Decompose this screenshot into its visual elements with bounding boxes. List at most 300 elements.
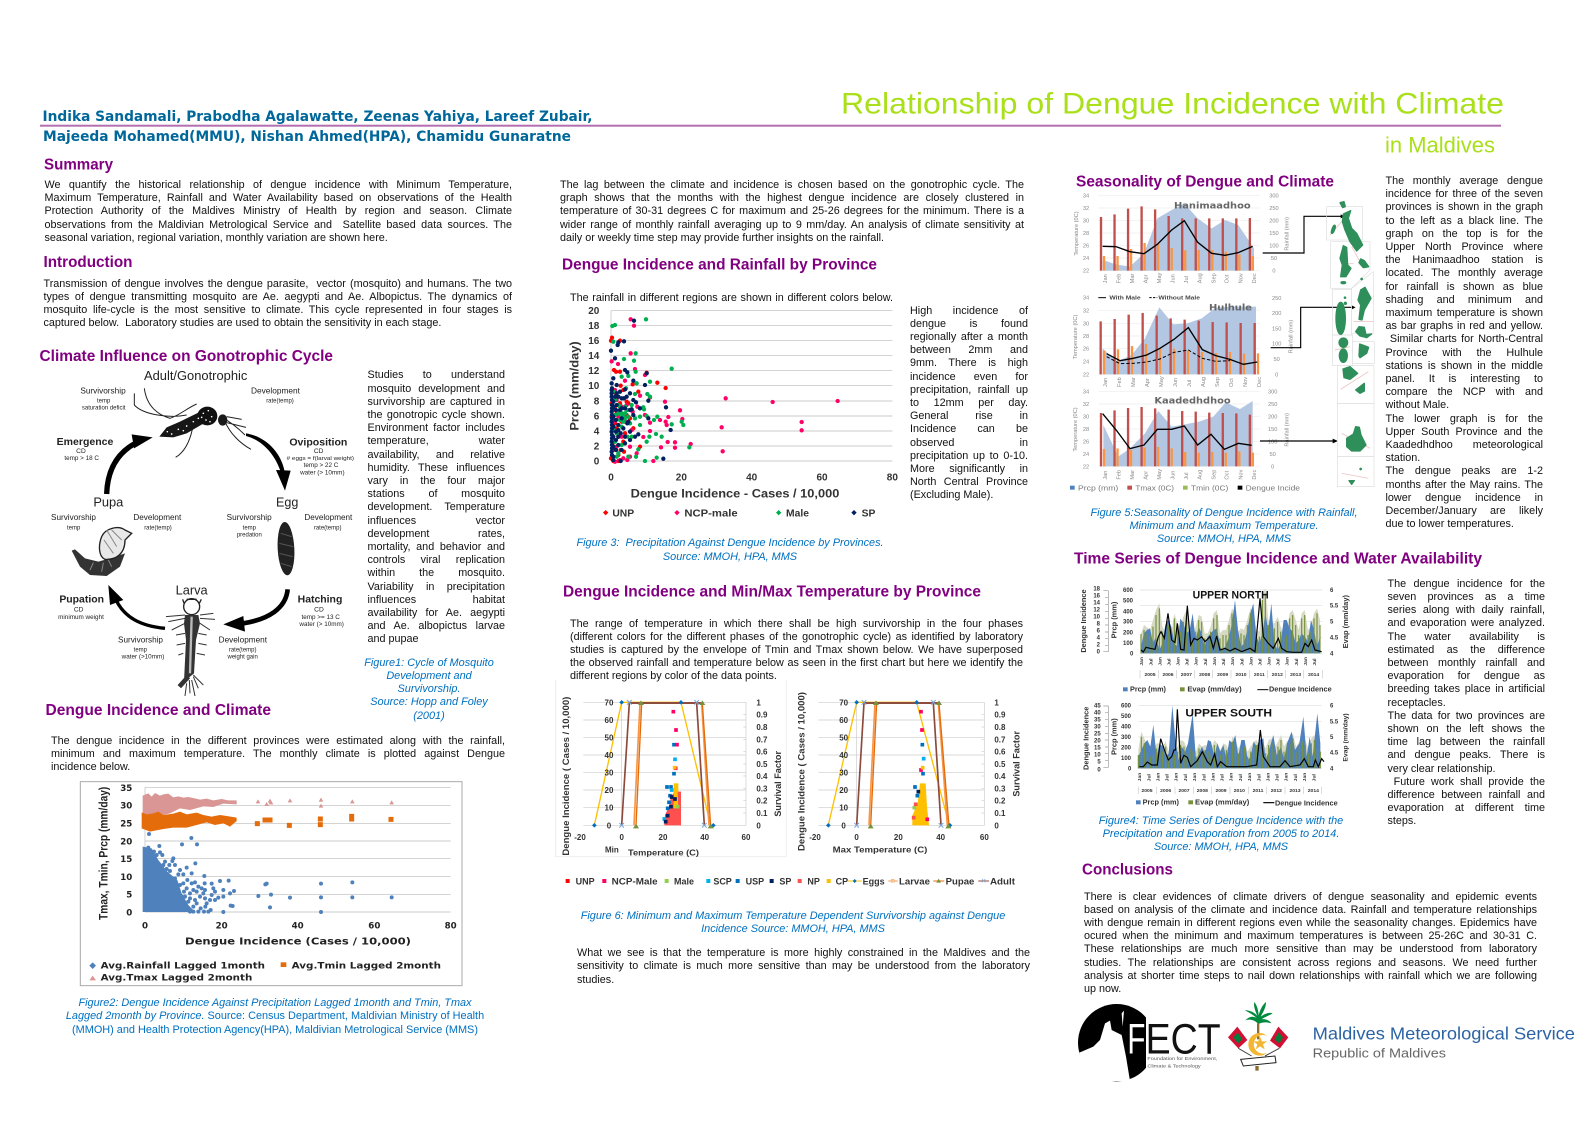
text block: introduction xyxy=(44,278,512,329)
text block: summary: Maximum Temperature, Rainfall and Water Availability based on observations of the Health xyxy=(44,192,512,204)
text block: seasonality notes: panel. It is interesting to xyxy=(1386,373,1543,385)
text block: temperature conclusion: studies. xyxy=(577,974,614,986)
panel: Hulhule chart: Jul xyxy=(1187,380,1193,387)
panel: min temperature chart: Min xyxy=(605,846,619,855)
panel: Upper South chart: 0 xyxy=(1128,766,1132,772)
diagram labels: predation xyxy=(237,533,262,539)
panel: max temperature chart: 30 xyxy=(839,769,849,778)
caption: figure 4 xyxy=(1099,815,1343,853)
panel: max temperature chart: 0 xyxy=(841,821,846,830)
panel: Upper South chart: 2006 xyxy=(1160,788,1171,794)
panel: Upper North chart: 6 xyxy=(1097,628,1101,634)
y axis title: Tmax, Tmin, Prcp (mm/day) xyxy=(96,787,110,920)
panel: Upper South chart: 6 xyxy=(1330,703,1334,709)
text block: time series notes: difference between rainfall and xyxy=(1388,789,1545,801)
panel: Upper South chart: Jan xyxy=(1192,773,1198,781)
panel: Upper South chart: 30 xyxy=(1094,724,1101,730)
caption: figure 3 xyxy=(576,537,884,562)
panel: Kaadedhdhoo chart: Jan xyxy=(1103,471,1109,480)
panel: Upper South chart: Jul xyxy=(1146,774,1152,781)
diagram labels: temp xyxy=(243,525,257,531)
caption: figure 2 xyxy=(66,997,484,1036)
panel: min temperature chart: 0 xyxy=(756,821,761,830)
panel: Hulhule chart: 100 xyxy=(1272,342,1281,348)
legend: Dengue Incide xyxy=(1246,483,1300,492)
panel: min temperature chart: Survival Factor xyxy=(773,750,783,817)
panel: Hulhule chart: Mar xyxy=(1131,377,1137,387)
panel: Kaadedhdhoo chart: 26 xyxy=(1083,439,1089,445)
panel: Hanimaadhoo chart: Temperature (0C) xyxy=(1074,211,1080,256)
panel: min temperature chart xyxy=(561,697,783,857)
panel: Hanimaadhoo chart: 22 xyxy=(1083,269,1089,275)
panel: max temperature chart: 0.3 xyxy=(994,784,1006,793)
panel: Upper North chart: 0 xyxy=(1130,651,1134,657)
panel: Upper North chart: Jan xyxy=(1248,657,1254,666)
axis labels: 6 xyxy=(594,411,600,422)
text block: rainfall notes: North Central Province xyxy=(910,476,1028,488)
panel: max temperature chart: 40 xyxy=(839,751,849,760)
text block: seasonality notes: Kaadedhdhoo meteorological xyxy=(1386,439,1543,451)
authors: Majeeda Mohamed(MMU), Nishan Ahmed(HPA), Chamidu Gunaratne xyxy=(43,129,571,145)
axis labels: 20 xyxy=(216,921,228,931)
chart: figure 5 seasonality charts and map xyxy=(1070,194,1356,492)
title: Relationship of Dengue Incidence with Climate xyxy=(841,88,1504,120)
panel: Hulhule chart: 28 xyxy=(1083,334,1089,340)
text block: rainfall notes: incidence even for xyxy=(910,371,1028,383)
panel: min temperature chart: -20 xyxy=(574,833,586,842)
diagram labels: rate(temp) xyxy=(266,399,294,405)
panel: Upper South chart: Jul xyxy=(1311,774,1317,781)
diagram: mosquito gonotrophic cycle xyxy=(51,369,354,696)
heading: Conclusions: Conclusions xyxy=(1082,862,1173,878)
panel: max temperature chart xyxy=(796,692,1021,855)
panel: max temperature chart: 0 xyxy=(994,821,999,830)
panel: Upper North chart: 5 xyxy=(1330,620,1334,626)
diagram labels: Survivorship xyxy=(118,636,164,645)
axis labels: 0 xyxy=(142,921,148,931)
text block: lag between climate and incidence: daily or weekly time step may provide further insights on the rainfall. xyxy=(560,232,884,244)
panel: Hanimaadhoo chart: Jun xyxy=(1171,274,1177,283)
panel: max temperature chart: 0 xyxy=(854,833,859,842)
text block: time series notes: time lag between the rainfall xyxy=(1388,736,1545,748)
panel: max temperature chart: Survival Factor xyxy=(1011,730,1021,797)
legend xyxy=(566,876,1015,886)
panel: Upper North chart: Evap (mm/day) xyxy=(1343,595,1350,648)
text block: seasonality notes: to the left as a black line. The xyxy=(1386,215,1543,227)
panel: Kaadedhdhoo chart: 32 xyxy=(1083,402,1089,408)
text block: introduction: types of dengue transmitting mosquito are Ae. aegypti and Ae. Albopictus. The dynamics of xyxy=(44,291,512,303)
text block: gonotrophic cycle notes: Environment factor includes xyxy=(368,422,505,434)
panel: Upper South chart: 45 xyxy=(1094,703,1101,709)
icon: larva xyxy=(166,599,215,696)
series: rainfall xyxy=(143,834,392,912)
panel: min temperature chart: 60 xyxy=(605,716,614,725)
icon: map of Maldives atolls xyxy=(1327,202,1374,487)
legend xyxy=(89,961,441,984)
text block: seasonality notes: Upper North Province where xyxy=(1386,241,1543,253)
text block: rainfall notes: precipitation, rainfall up xyxy=(910,384,1028,396)
panel: Upper North chart: 16 xyxy=(1093,594,1101,600)
panel: Upper South chart: Jan xyxy=(1155,773,1161,781)
text block: seasonality notes: stations is shown in the middle xyxy=(1386,360,1543,372)
text block: lag between climate and incidence xyxy=(560,179,1024,244)
panel: Upper North chart: 5.5 xyxy=(1330,604,1339,610)
panel: Upper North chart: Jan xyxy=(1303,657,1309,666)
panel: Hulhule chart: Without Male xyxy=(1158,295,1200,301)
panel: Upper South chart: 300 xyxy=(1121,735,1132,741)
panel: Upper South chart: 100 xyxy=(1121,756,1132,762)
panel: Upper South chart: 5.5 xyxy=(1330,719,1339,725)
arrow: hatching xyxy=(223,589,288,632)
text block: time series notes: evaporation for dengue as xyxy=(1388,670,1545,682)
panel: Hanimaadhoo chart xyxy=(1074,194,1291,283)
heading: Introduction: Introduction xyxy=(44,254,132,271)
panel: Upper North chart: 400 xyxy=(1123,609,1134,615)
legend: UNP xyxy=(612,508,634,519)
text block: summary xyxy=(44,179,512,244)
panel: Upper South chart: 0 xyxy=(1097,767,1101,773)
panel: min temperature chart: 40 xyxy=(605,751,614,760)
panel: max temperature chart: 0.6 xyxy=(994,748,1006,757)
panel: Hulhule chart: 50 xyxy=(1274,357,1280,363)
panel: Upper North chart: 4.5 xyxy=(1330,636,1339,642)
panel: max temperature chart: 60 xyxy=(839,716,849,725)
panel: Kaadedhdhoo chart: Kaadedhdhoo xyxy=(1154,396,1231,406)
logo: FECT xyxy=(1078,1000,1221,1083)
panel: Upper North chart: Jan xyxy=(1194,657,1200,666)
panel: Upper North chart: Prcp (mm) xyxy=(1130,687,1166,694)
panel: Upper South chart: 40 xyxy=(1094,710,1101,716)
axis labels: 20 xyxy=(676,473,687,484)
panel: Hanimaadhoo chart: Apr xyxy=(1144,274,1150,283)
panel: max temperature chart: 10 xyxy=(839,804,849,813)
axis labels: 20 xyxy=(588,306,600,317)
caption: figure 6: Incidence Source: MMOH, HPA, MMS xyxy=(701,923,885,935)
text block: rainfall notes: 9mm. There is high xyxy=(910,357,1028,369)
panel: Upper North chart: 2012 xyxy=(1272,672,1283,678)
panel: Kaadedhdhoo chart: Dec xyxy=(1252,469,1258,480)
panel: Hulhule chart: Nov xyxy=(1243,377,1249,387)
diagram labels: Development xyxy=(219,636,268,645)
panel: Kaadedhdhoo chart: 0 xyxy=(1271,464,1274,470)
panel: min temperature chart: 0 xyxy=(607,821,612,830)
panel: Upper South chart: 35 xyxy=(1094,717,1101,723)
panel: Upper North chart: Jan xyxy=(1212,657,1218,666)
panel: Upper North chart: 8 xyxy=(1097,621,1101,627)
panel: Hulhule chart: Dec xyxy=(1257,377,1263,387)
text block: time series notes xyxy=(1388,578,1545,827)
panel: Upper North chart: 600 xyxy=(1123,588,1134,594)
panel: Upper South chart: Dengue Incidence xyxy=(1275,801,1338,808)
text block: summary: seasonal variation, regional variation, monthly variation are shown here. xyxy=(44,232,388,244)
legend: SCP xyxy=(713,876,732,886)
panel: Upper North chart: UPPER NORTH xyxy=(1193,589,1269,601)
axis labels: 18 xyxy=(588,321,600,332)
panel: Upper South chart: Jan xyxy=(1284,773,1290,781)
text block: rainfall notes: observed in xyxy=(910,437,1028,449)
panel: Upper South chart: 400 xyxy=(1121,724,1132,730)
panel: Hanimaadhoo chart: 150 xyxy=(1269,231,1279,237)
text block: conclusions xyxy=(1084,890,1537,995)
panel: Upper North chart: Prcp (mm) xyxy=(1112,602,1119,638)
panel: Kaadedhdhoo chart: 34 xyxy=(1083,390,1089,396)
text block: time series notes: shown on the left shows the xyxy=(1388,723,1545,735)
axis labels: 10 xyxy=(588,381,600,392)
diagram labels: Pupa xyxy=(93,496,124,510)
text block: seasonality notes: due to lower temperatures. xyxy=(1386,518,1514,530)
legend: Tmin (0C) xyxy=(1191,483,1228,492)
panel: Upper North chart: 2014 xyxy=(1308,672,1319,678)
text block: seasonality notes: for rainfall is shown as blue xyxy=(1386,281,1543,293)
panel: Hanimaadhoo chart: Jan xyxy=(1103,274,1109,283)
diagram labels: temp > 18 C xyxy=(64,455,99,462)
panel: Hulhule chart: 30 xyxy=(1083,321,1089,327)
panel: Hanimaadhoo chart: Feb xyxy=(1116,274,1122,283)
panel: Hanimaadhoo chart: 0 xyxy=(1272,269,1276,275)
logo: FECT: Climate & Technology xyxy=(1147,1063,1201,1069)
logos xyxy=(1078,1000,1575,1083)
diagram labels: weight gain xyxy=(227,654,258,660)
text block: dengue incidence and climate: incidence below. xyxy=(51,760,130,772)
text block: time series notes: The data for two provinces are xyxy=(1388,710,1545,722)
axis labels: 4 xyxy=(594,426,600,437)
panel: Hulhule chart: 250 xyxy=(1272,296,1281,302)
text block: rainfall notes: regionally after a month xyxy=(910,331,1028,343)
axis labels: Dengue Incidence - Cases / 10,000 xyxy=(631,486,840,500)
panel: Hulhule chart: Feb xyxy=(1117,377,1123,387)
text block: seasonality notes: maximum temperature is shown xyxy=(1386,307,1543,319)
text block: introduction: captured below. Laboratory studies are used to obtain the sensitivity in each stage. xyxy=(44,317,441,329)
caption: figure 6: Figure 6: Minimum and Maximum Temperature Dependent Survivorship against Dengue xyxy=(581,910,1005,922)
panel: max temperature chart: 40 xyxy=(936,833,946,842)
text block: gonotrophic cycle notes: humidity. These influences xyxy=(368,462,505,474)
arrow: Hulhule to map xyxy=(1271,305,1356,348)
panel: min temperature chart: 0 xyxy=(619,833,624,842)
panel: Kaadedhdhoo chart: Jun xyxy=(1171,471,1177,480)
caption: figure 2: Lagged 2month by Province. Source: Census Department, Maldivian Ministry of Health xyxy=(66,1010,484,1022)
axis labels: 5 xyxy=(126,891,132,901)
text block: gonotrophic cycle notes: development. Temperature xyxy=(368,501,505,513)
panel: Upper South chart: 2011 xyxy=(1253,788,1264,794)
text block: temperature range: (different colors for the different phases of the gonotrophic cycle) as identified by laboratory xyxy=(570,631,1023,643)
panel: Upper South chart: 5 xyxy=(1097,759,1101,765)
caption: figure 1 xyxy=(364,657,494,722)
panel: Upper North chart: 2005 xyxy=(1144,672,1156,678)
panel: Upper South chart: Jan xyxy=(1137,773,1143,781)
axis labels xyxy=(567,306,898,500)
text block: lag between climate and incidence: graph shows that the months with the highest dengue incidence are closely clustered in xyxy=(560,192,1024,204)
heading: Dengue Incidence and Climate: Dengue Incidence and Climate xyxy=(46,702,271,719)
panel: Upper North chart: 4 xyxy=(1097,635,1101,641)
text block: rainfall chart intro: The rainfall in different regions are shown in different colors below. xyxy=(570,292,893,304)
axis labels: 60 xyxy=(816,473,828,484)
text block: temperature range: The range of temperature in which there shall be high survivorship in the four phases xyxy=(570,618,1023,630)
panel: Kaadedhdhoo chart: Sep xyxy=(1211,470,1217,480)
panel: Upper South chart: 2007 xyxy=(1178,788,1190,794)
panel: Upper South chart: 2013 xyxy=(1289,788,1301,794)
panel: min temperature chart: 70 xyxy=(605,698,614,707)
caption: figure 1: Figure1: Cycle of Mosquito xyxy=(364,657,494,669)
text block: conclusions: analysis at shorter time steps to nail down relationships with rainfall which we are following xyxy=(1084,970,1537,982)
diagram labels: CD xyxy=(314,607,324,614)
panel: Upper North chart: Jul xyxy=(1203,658,1209,666)
panel: Upper North chart: 100 xyxy=(1123,641,1134,647)
text block: temperature range: different regions by color of the data points. xyxy=(570,670,777,682)
panel: Upper South chart: Jan xyxy=(1174,773,1180,781)
text block: seasonality notes: Upper South Province and the xyxy=(1386,426,1543,438)
panel: min temperature chart: 0.2 xyxy=(756,797,768,806)
panel: Upper North chart xyxy=(1081,587,1350,694)
text block: gonotrophic cycle notes: and pupae xyxy=(368,633,419,645)
diagram labels: CD xyxy=(74,607,84,614)
legend: Adult xyxy=(990,876,1015,886)
text block: seasonality notes: lower dengue incidence in xyxy=(1386,492,1543,504)
text block: dengue incidence and climate: The dengue incidence in the different provinces were estimated along with the rainfall, xyxy=(51,735,505,747)
panel: max temperature chart: 0.8 xyxy=(994,723,1006,732)
text block: temperature conclusion xyxy=(577,947,1030,986)
diagram labels xyxy=(51,369,354,660)
text block: introduction: mosquito life-cycle is the most sensitive to climate. This cycle represented in four stages is xyxy=(44,304,512,316)
axis labels: 0 xyxy=(608,473,614,484)
caption: figure 1: Development and xyxy=(386,670,472,682)
panel: Upper South chart: Jul xyxy=(1256,774,1262,781)
panel: Hanimaadhoo chart: 100 xyxy=(1269,244,1279,250)
panel: Upper South chart: Evap (mm/day) xyxy=(1344,713,1350,762)
panel: Upper South chart: Evap (mm/day) xyxy=(1195,800,1249,807)
panel: Hulhule chart: Aug xyxy=(1201,377,1207,387)
diagram labels: CD xyxy=(314,448,324,455)
panel: Upper North chart: 6 xyxy=(1330,588,1334,594)
panel: Upper North chart: 2008 xyxy=(1199,672,1210,678)
legend: Larvae xyxy=(899,876,930,886)
panel: Upper North chart: 2013 xyxy=(1290,672,1301,678)
text block: seasonality notes: graph on the top is for the xyxy=(1386,228,1543,240)
panel: min temperature chart: 0.8 xyxy=(756,723,768,732)
panel: Upper North chart: 4 xyxy=(1330,651,1334,657)
diagram labels: water (> 10mm) xyxy=(298,621,344,628)
diagram labels: temp xyxy=(134,647,148,653)
panel: Hulhule chart: Temperature (0C) xyxy=(1073,315,1079,359)
text block: time series notes: steps. xyxy=(1388,815,1416,827)
axis labels: 12 xyxy=(588,366,600,377)
diagram labels: # eggs = f(larval weight) xyxy=(287,456,354,462)
legend: UNP xyxy=(576,876,595,886)
panel: Hanimaadhoo chart: Hanimaadhoo xyxy=(1174,201,1251,211)
text block: dengue incidence and climate xyxy=(51,735,505,772)
diagram labels: temp > 22 C xyxy=(304,462,339,469)
panel: Upper South chart: Jul xyxy=(1220,774,1226,781)
diagram labels: Hatching xyxy=(298,595,342,606)
diagram labels: water (>10mm) xyxy=(121,653,164,660)
panel: Kaadedhdhoo chart: Oct xyxy=(1225,470,1231,480)
panel: Hanimaadhoo chart: Mar xyxy=(1130,273,1136,283)
panel: Hulhule chart: Apr xyxy=(1145,378,1151,387)
panel: Hanimaadhoo chart: 30 xyxy=(1083,219,1089,225)
text block: seasonality notes: compare the NCP with and xyxy=(1386,386,1543,398)
panel: Kaadedhdhoo chart: Mar xyxy=(1130,470,1136,480)
text block: conclusions: ocured when the minimum and maximum temperatures is between 25-26C and 30-31 C. xyxy=(1084,930,1537,942)
panel: Upper South chart: Jan xyxy=(1229,773,1235,781)
panel: Upper South chart: Jul xyxy=(1238,774,1244,781)
legend: Prcp (mm) xyxy=(1078,483,1118,492)
icon: pupa xyxy=(72,528,132,576)
panel: Upper South chart: Jan xyxy=(1247,773,1253,781)
legend: Eggs xyxy=(863,876,885,886)
legend: Pupae xyxy=(946,876,974,886)
panel: Hanimaadhoo chart: 28 xyxy=(1083,231,1089,237)
panel: max temperature chart: 0.9 xyxy=(994,711,1006,720)
panel: Hulhule chart xyxy=(1073,295,1295,387)
text block: time series notes: breeding takes place in artificial xyxy=(1388,683,1545,695)
panel: Upper North chart: Jul xyxy=(1294,658,1300,666)
legend: Avg.Rainfall Lagged 1month xyxy=(101,961,265,971)
panel: Upper North chart: 2006 xyxy=(1162,672,1174,678)
diagram labels: rate(temp) xyxy=(314,525,341,531)
panel: Upper North chart: Jul xyxy=(1312,658,1318,666)
chart: figure 3 precipitation by province scatter xyxy=(567,306,898,519)
panel: min temperature chart: 1 xyxy=(756,698,761,707)
text block: gonotrophic cycle notes: influences habitat xyxy=(368,594,505,606)
panel: Kaadedhdhoo chart: Nov xyxy=(1238,469,1244,480)
panel: Hulhule chart: With Male xyxy=(1109,295,1141,301)
panel: Upper South chart: 10 xyxy=(1094,752,1101,758)
diagram labels: water (> 10mm) xyxy=(299,469,345,476)
panel: Hulhule chart: Jan xyxy=(1103,378,1109,387)
panel: Upper North chart: Jan xyxy=(1230,657,1236,666)
text block: time series notes: The dengue incidence for the xyxy=(1388,578,1545,590)
text block: seasonality notes xyxy=(1386,175,1543,530)
panel: Hulhule chart: 34 xyxy=(1083,296,1089,302)
panel: Upper North chart: 0 xyxy=(1097,649,1101,655)
text block: seasonality notes: the Hanimaadhoo station is xyxy=(1386,254,1543,266)
text block: seasonality notes: station. xyxy=(1386,452,1420,464)
panel: Upper South chart: Jan xyxy=(1302,773,1308,781)
panel: Hulhule chart: 22 xyxy=(1083,372,1089,378)
diagram labels: Emergence xyxy=(57,437,114,448)
text block: temperature range: the observed rainfall and temperature below as seen in the first chart but here we identify the xyxy=(570,657,1023,669)
panel: Upper North chart: Jul xyxy=(1239,658,1245,666)
panel: Upper South chart: 600 xyxy=(1121,703,1132,709)
panel: Upper North chart: Dengue Incidence xyxy=(1269,687,1332,694)
text block: gonotrophic cycle notes: the gonotropic cycle shown. xyxy=(368,409,505,421)
panel: min temperature chart: 50 xyxy=(605,733,614,742)
panel: Hulhule chart: 200 xyxy=(1272,311,1281,317)
caption: figure 5: Figure 5:Seasonality of Dengue Incidence with Rainfall, xyxy=(1090,507,1357,519)
axis labels: Dengue Incidence (Cases / 10,000) xyxy=(185,936,411,947)
legend xyxy=(603,508,876,519)
legend: Male xyxy=(674,876,694,886)
panel: Upper South chart: Dengue Incidence xyxy=(1084,707,1091,770)
text block: seasonality notes: as bar graphs in red and yellow. xyxy=(1386,320,1543,332)
panel: min temperature chart: 0.1 xyxy=(756,809,768,818)
panel: min temperature chart: Temperature (C) xyxy=(628,847,699,857)
panel: Hulhule chart: Rainfall (mm) xyxy=(1289,320,1295,353)
panel: Hulhule chart: Jun xyxy=(1173,378,1179,387)
text block: rainfall notes: between 2mm and xyxy=(910,344,1028,356)
logo: FECT: F xyxy=(1127,1015,1145,1063)
text block: gonotrophic cycle notes: Variability in precipitation xyxy=(368,581,505,593)
panel: Hanimaadhoo chart: Dec xyxy=(1252,273,1258,283)
heading: Time Series of Dengue Incidence and Water Availability: Time Series of Dengue Incidence and Water Availability xyxy=(1074,550,1482,568)
diagram labels: rate(temp) xyxy=(144,525,172,531)
panel: Upper North chart: 2010 xyxy=(1235,672,1247,678)
panel: Kaadedhdhoo chart: Aug xyxy=(1198,470,1204,480)
text block: lag between climate and incidence: The lag between the climate and incidence is chosen based on the gonotrophic cycle. The xyxy=(560,179,1024,191)
axis labels: 30 xyxy=(120,802,132,812)
diagram labels: Oviposition xyxy=(289,437,347,448)
panel: Upper South chart: 2010 xyxy=(1234,788,1245,794)
text block: seasonality notes: provinces is shown in the graph xyxy=(1386,201,1543,213)
